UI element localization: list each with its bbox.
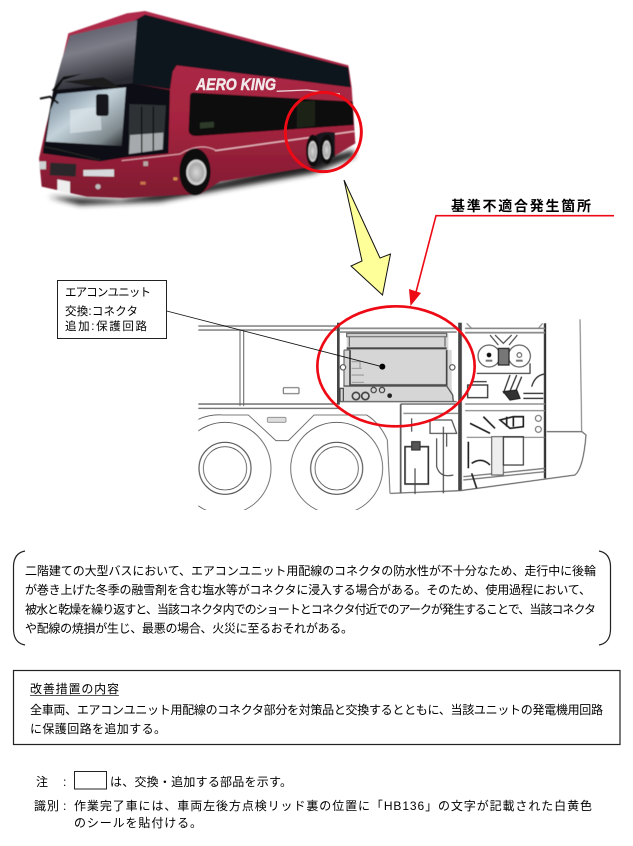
corrective action heading: 改善措置の内容 [30,681,119,696]
red leader arrow [409,216,614,306]
callout: air conditioner unit: 交換:コネクタ [65,305,138,318]
callout: air conditioner unit: 追加:保護回路 [65,319,148,333]
identification note: 識別 [34,799,59,813]
panel: corrective action [14,670,620,744]
door latch [283,388,299,394]
leader dot [379,364,385,370]
wheels and fenders [198,414,390,510]
note: : [63,775,66,789]
front black frame [43,83,170,161]
trim line [215,131,354,151]
note: 注 [36,775,48,789]
door window [128,104,166,155]
identification note: : [63,799,66,813]
center pillar and lower compartment [390,319,586,493]
callout: air conditioner unit: エアコンユニット [65,287,151,299]
leader line [167,311,382,367]
bus logo: AERO KING [195,75,276,94]
unit frame lines [198,323,457,408]
left bracket [14,551,25,645]
location heading: 基準不適合発生箇所 [451,198,591,214]
description text: 二階建ての大型バスにおいて、エアコンユニット用配線のコネクタの防水性が不十分なため、走行中に後輪 [25,563,596,578]
description text: 被水と乾燥を繰り返すと、当該コネクタ内でのショートとコネクタ付近でのアークが発生することで、当該コネクタ [25,602,596,616]
description text [25,563,596,636]
front wheel [179,148,211,195]
bus photo [39,11,361,205]
description text: が巻き上げた冬季の融雪剤を含む塩水等がコネクタに浸入する場合がある。そのため、使用過程において、 [25,582,591,597]
corrective action text [30,702,603,736]
note: は、交換・追加する部品を示す。 [110,774,292,789]
callout: air conditioner unit [58,280,166,338]
bus front details [39,74,177,193]
upper windshield [53,20,137,91]
note [36,772,292,789]
rear wheels [306,132,335,167]
bus body [39,11,355,198]
identification note: 作業完了車には、車両左後方点検リッド裏の位置に「HB136」の文字が記載された白黄色 [74,798,592,813]
engine bay parts [405,374,545,494]
gray air conditioner unit [340,333,453,402]
technical diagram [179,306,586,514]
identification note [34,798,592,830]
description text: や配線の焼損が生じ、最悪の場合、火災に至るおそれがある。 [25,620,353,636]
lower windshield [46,87,126,146]
side windows [189,93,354,136]
yellow arrow [344,180,390,295]
red circle on diagram [317,306,475,426]
identification note: のシールを貼付ける。 [74,815,202,830]
note legend box [74,772,106,789]
upper side glazing [132,15,351,89]
corrective action text: に保護回路を追加する。 [30,721,166,736]
right bracket [599,551,610,645]
corrective action text: 全車両、エアコンユニット用配線のコネクタ部分を対策品と交換するとともに、当該ユニットの発電機用回路 [30,702,603,717]
pump assembly [477,335,530,373]
red circle on bus [285,92,361,172]
bus shadow [48,150,355,205]
panel: defect description [14,551,610,645]
